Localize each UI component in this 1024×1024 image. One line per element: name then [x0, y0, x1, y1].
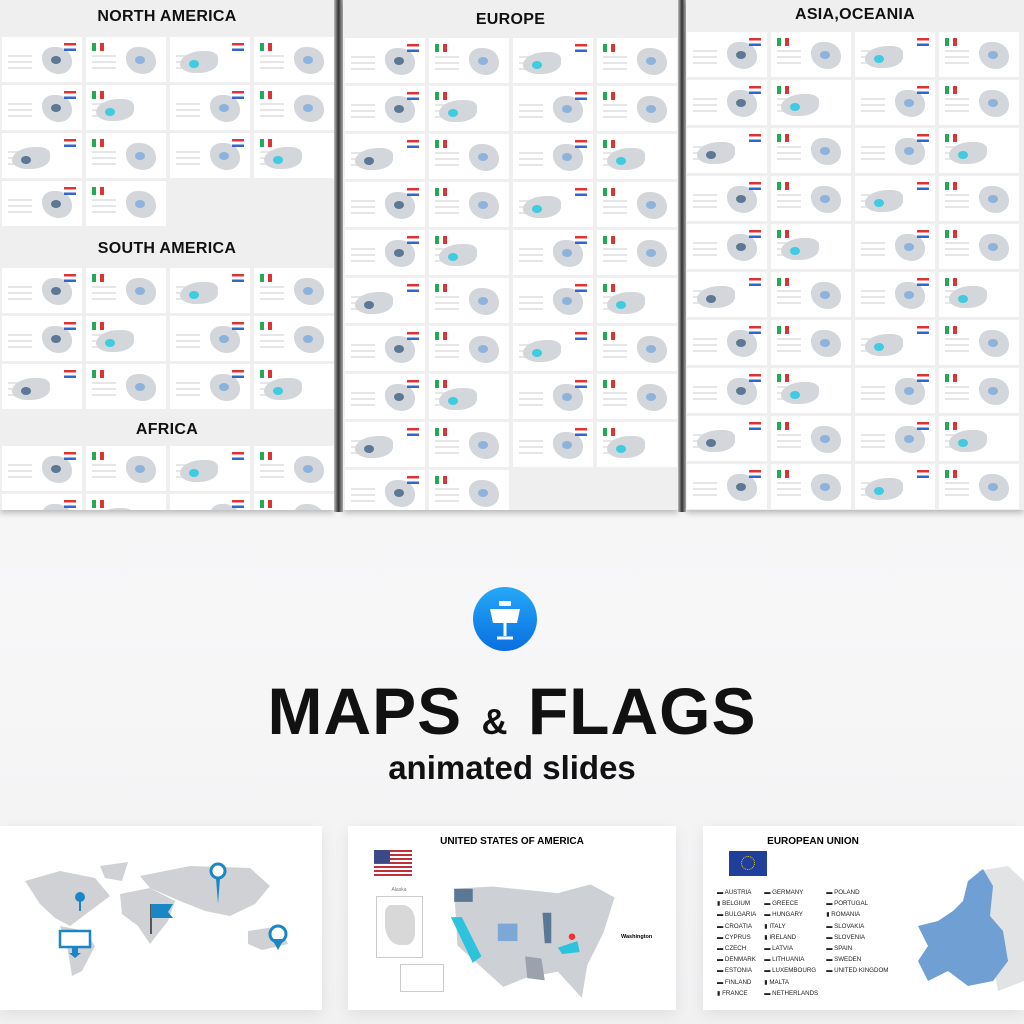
heading: south america: SOUTH AMERICA	[98, 240, 236, 257]
heading: north america: NORTH AMERICA	[97, 8, 237, 25]
card: world map	[0, 826, 322, 1010]
list: eu countries: ▬ CZECH	[717, 945, 746, 952]
icon: eu flag	[729, 851, 767, 876]
list: eu countries: ▬ BULGARIA	[717, 911, 756, 918]
list: eu countries: ▬ GREECE	[764, 900, 798, 907]
list: eu countries: ▬ UNITED KINGDOM	[826, 967, 888, 974]
list: eu countries: ▮ MALTA	[764, 979, 789, 986]
list: eu countries: ▮ BELGIUM	[717, 900, 750, 907]
icon: pins and flag	[60, 864, 286, 958]
list: eu countries: ▬ SLOVENIA	[826, 934, 865, 941]
heading: europe: EUROPE	[476, 11, 545, 28]
heading: africa: AFRICA	[136, 421, 198, 438]
list: eu countries: ▬ SPAIN	[826, 945, 852, 952]
card: united states	[348, 826, 676, 1010]
heading: eu: EUROPEAN UNION	[767, 836, 859, 847]
list: eu countries: ▬ DENMARK	[717, 956, 756, 963]
list: eu countries: ▬ LUXEMBOURG	[764, 967, 816, 974]
list: eu countries: ▬ AUSTRIA	[717, 889, 751, 896]
list: eu countries: ▬ NETHERLANDS	[764, 990, 818, 997]
list: eu countries: ▮ IRELAND	[764, 934, 796, 941]
grid: africa slides	[2, 446, 334, 510]
list: eu countries: ▬ CROATIA	[717, 923, 752, 930]
list: eu countries: ▮ ROMANIA	[826, 911, 860, 918]
list: eu countries: ▬ GERMANY	[764, 889, 803, 896]
list: eu countries	[717, 889, 888, 997]
icon: us flag	[374, 850, 412, 876]
grid: asia slides	[687, 32, 1019, 509]
list: eu countries: ▬ CYPRUS	[717, 934, 751, 941]
grid: north america slides	[2, 37, 334, 226]
card: united states: Washington	[621, 934, 652, 940]
map: europe	[918, 866, 1024, 991]
grid: europe slides	[345, 38, 677, 510]
list: eu countries: ▬ ESTONIA	[717, 967, 752, 974]
list: eu countries: ▬ POLAND	[826, 889, 860, 896]
card: european union	[703, 826, 1024, 1010]
heading: usa: UNITED STATES OF AMERICA	[440, 836, 584, 847]
heading: asia oceania: ASIA,OCEANIA	[795, 6, 915, 23]
card: united states: Alaska	[391, 887, 406, 893]
list: eu countries: ▬ SWEDEN	[826, 956, 861, 963]
list: eu countries: ▬ FINLAND	[717, 979, 751, 986]
icon: keynote	[473, 587, 537, 651]
grid: south america slides	[2, 268, 334, 409]
list: eu countries: ▮ FRANCE	[717, 990, 748, 997]
subtitle: animated slides	[388, 749, 636, 786]
list: eu countries: ▬ SLOVAKIA	[826, 923, 864, 930]
list: eu countries: ▬ LITHUANIA	[764, 956, 804, 963]
list: eu countries: ▬ PORTUGAL	[826, 900, 868, 907]
title: MAPS & FLAGS	[267, 674, 757, 748]
map: usa	[451, 884, 614, 998]
list: eu countries: ▬ LATVIA	[764, 945, 793, 952]
panel: north/south america & africa	[0, 0, 334, 510]
list: eu countries: ▮ ITALY	[764, 923, 786, 930]
panel: europe	[343, 0, 678, 510]
panel: asia oceania	[686, 0, 1024, 510]
list: eu countries: ▬ HUNGARY	[764, 911, 803, 918]
